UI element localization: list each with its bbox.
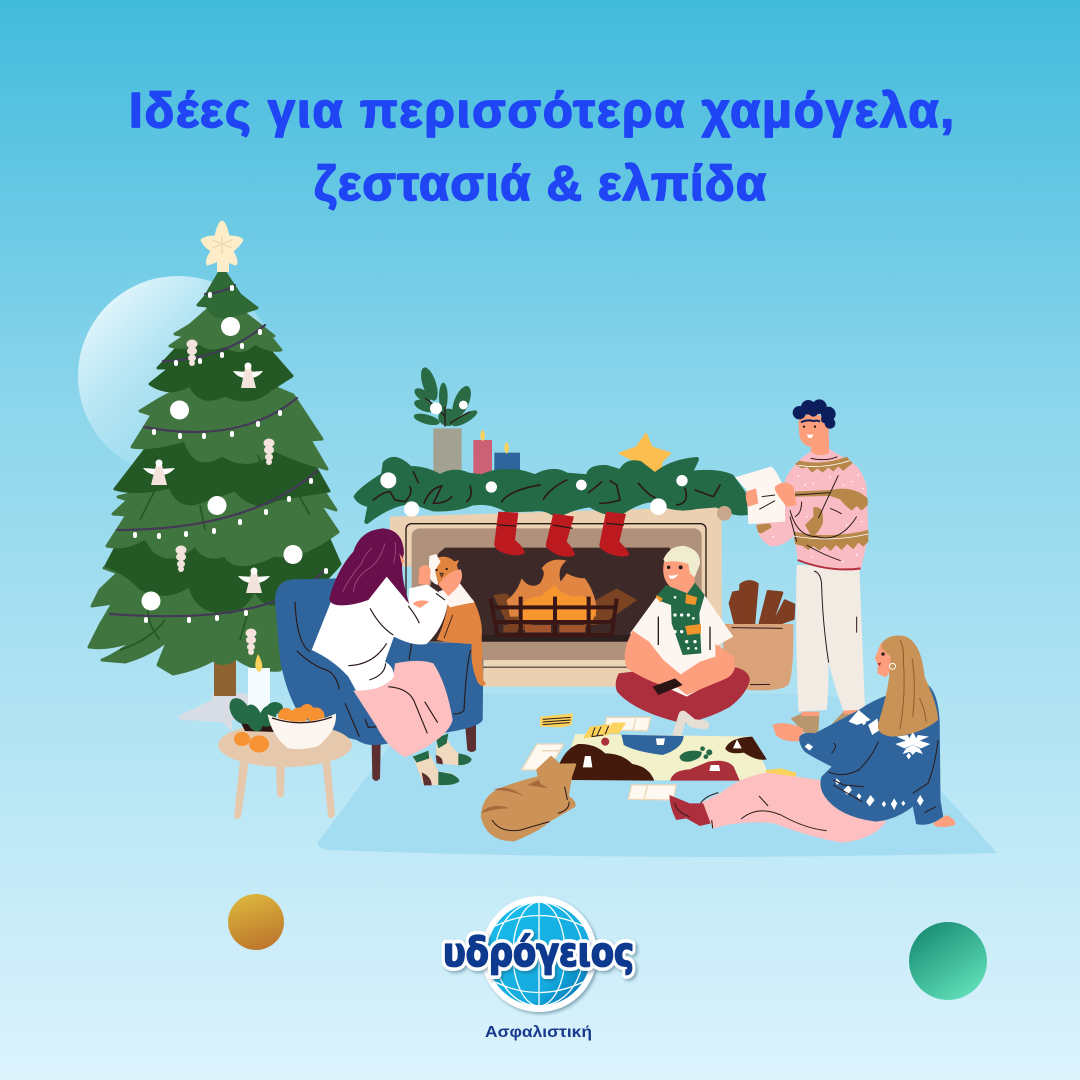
garland branch lines [373,472,720,505]
green ball [909,922,987,1000]
yellow cards on board [583,723,626,738]
sweater snowflake [895,732,930,755]
woman sitting on floor [669,635,955,843]
fireplace hearth [412,528,702,660]
stocking fold lines [497,523,624,528]
company logo [443,896,634,1041]
white playing cards [521,717,676,800]
sweater red hem [798,560,861,569]
sweater patterned bands [756,457,868,551]
paper lines [759,495,775,509]
tree light strings [110,285,325,616]
woman face and hands [399,553,462,608]
flames [507,560,597,623]
table top [218,723,352,767]
candles [473,429,520,477]
trouser lines [814,571,857,663]
white candle [248,654,270,713]
curly hair [793,399,836,429]
mantel tan knob [717,506,732,521]
small plant [225,694,283,734]
standing man socks [791,712,858,740]
earring [889,663,896,669]
gold ball [228,894,284,950]
fireplace opening outline [406,524,706,667]
title: ζεστασιά & ελπίδα [314,157,766,211]
board game on carpet [521,713,796,800]
sleeping tabby cat [481,757,575,840]
woman long hair [878,635,938,737]
woman white sweater [312,577,448,691]
title [129,84,954,211]
angel ornaments [143,362,270,593]
fire grate [491,597,617,635]
logo wordmark outline: υδρόγειος [443,930,634,976]
firewood logs [730,581,794,623]
woman hand and foot [773,723,955,827]
neck and head [798,414,829,455]
board red territories [670,761,740,781]
woman face [875,643,896,677]
wood basket and standing man [723,399,868,740]
fireplace with mantel decorations [356,365,748,687]
armchair legs [372,723,476,781]
vase with branches [412,365,479,477]
christmas tree [89,221,340,732]
logs [493,588,637,630]
decorative moon circle [78,276,278,476]
carpet [318,694,997,857]
tree foliage [89,268,340,674]
loose oranges [234,732,269,752]
woman pink trousers [700,773,886,843]
logo tagline: Ασφαλιστική [485,1024,592,1041]
yellow card stack [540,713,573,727]
hands [746,482,797,507]
red stockings [494,512,629,557]
wood basket [723,624,793,690]
fireplace surround [390,507,722,687]
sweater [756,447,868,570]
basket lines [732,628,783,685]
tree trunk and stand [178,650,262,732]
man shirt and upper body [625,546,735,697]
board dark brown territories [560,737,767,781]
sweater lines [790,457,857,561]
sheet of paper [735,467,785,524]
board green territory [680,751,702,762]
pink skirt [353,661,453,757]
game board [560,734,771,781]
standing man trousers [796,565,865,712]
white bowl [269,715,335,748]
man head and hair [663,546,700,595]
yellow card under leg [766,768,796,779]
woman hair [329,528,409,605]
woman socks [413,733,472,785]
man trousers and sock [616,667,750,735]
board blue territory [621,735,684,755]
gold star decoration [620,434,670,478]
tree ball ornaments [142,317,302,610]
armchair lines [295,602,471,737]
logo globe [481,896,597,1012]
oranges in bowl [278,704,324,724]
title: Ιδέες για περισσότερα χαμόγελα, [129,84,954,138]
phone [653,678,683,695]
red socks [669,795,711,826]
fireplace firebox [417,548,670,642]
logo wordmark: υδρόγειος [443,930,634,976]
table legs [234,758,335,819]
icicle ornaments [176,340,274,655]
armchair [275,578,483,745]
garland white balls [380,472,688,517]
man scarf [656,583,705,655]
sitting man [616,546,750,735]
orange cat [429,554,486,686]
board white pieces [583,738,742,771]
blue patterned sweater [799,683,943,825]
sweater diamonds [805,710,924,810]
green garland [356,459,748,522]
tree star topper [201,221,243,272]
ankle skin [802,708,858,716]
woman in armchair with orange cat [275,528,486,785]
side table with candle and oranges [218,654,352,819]
tree bulbs [133,285,328,623]
